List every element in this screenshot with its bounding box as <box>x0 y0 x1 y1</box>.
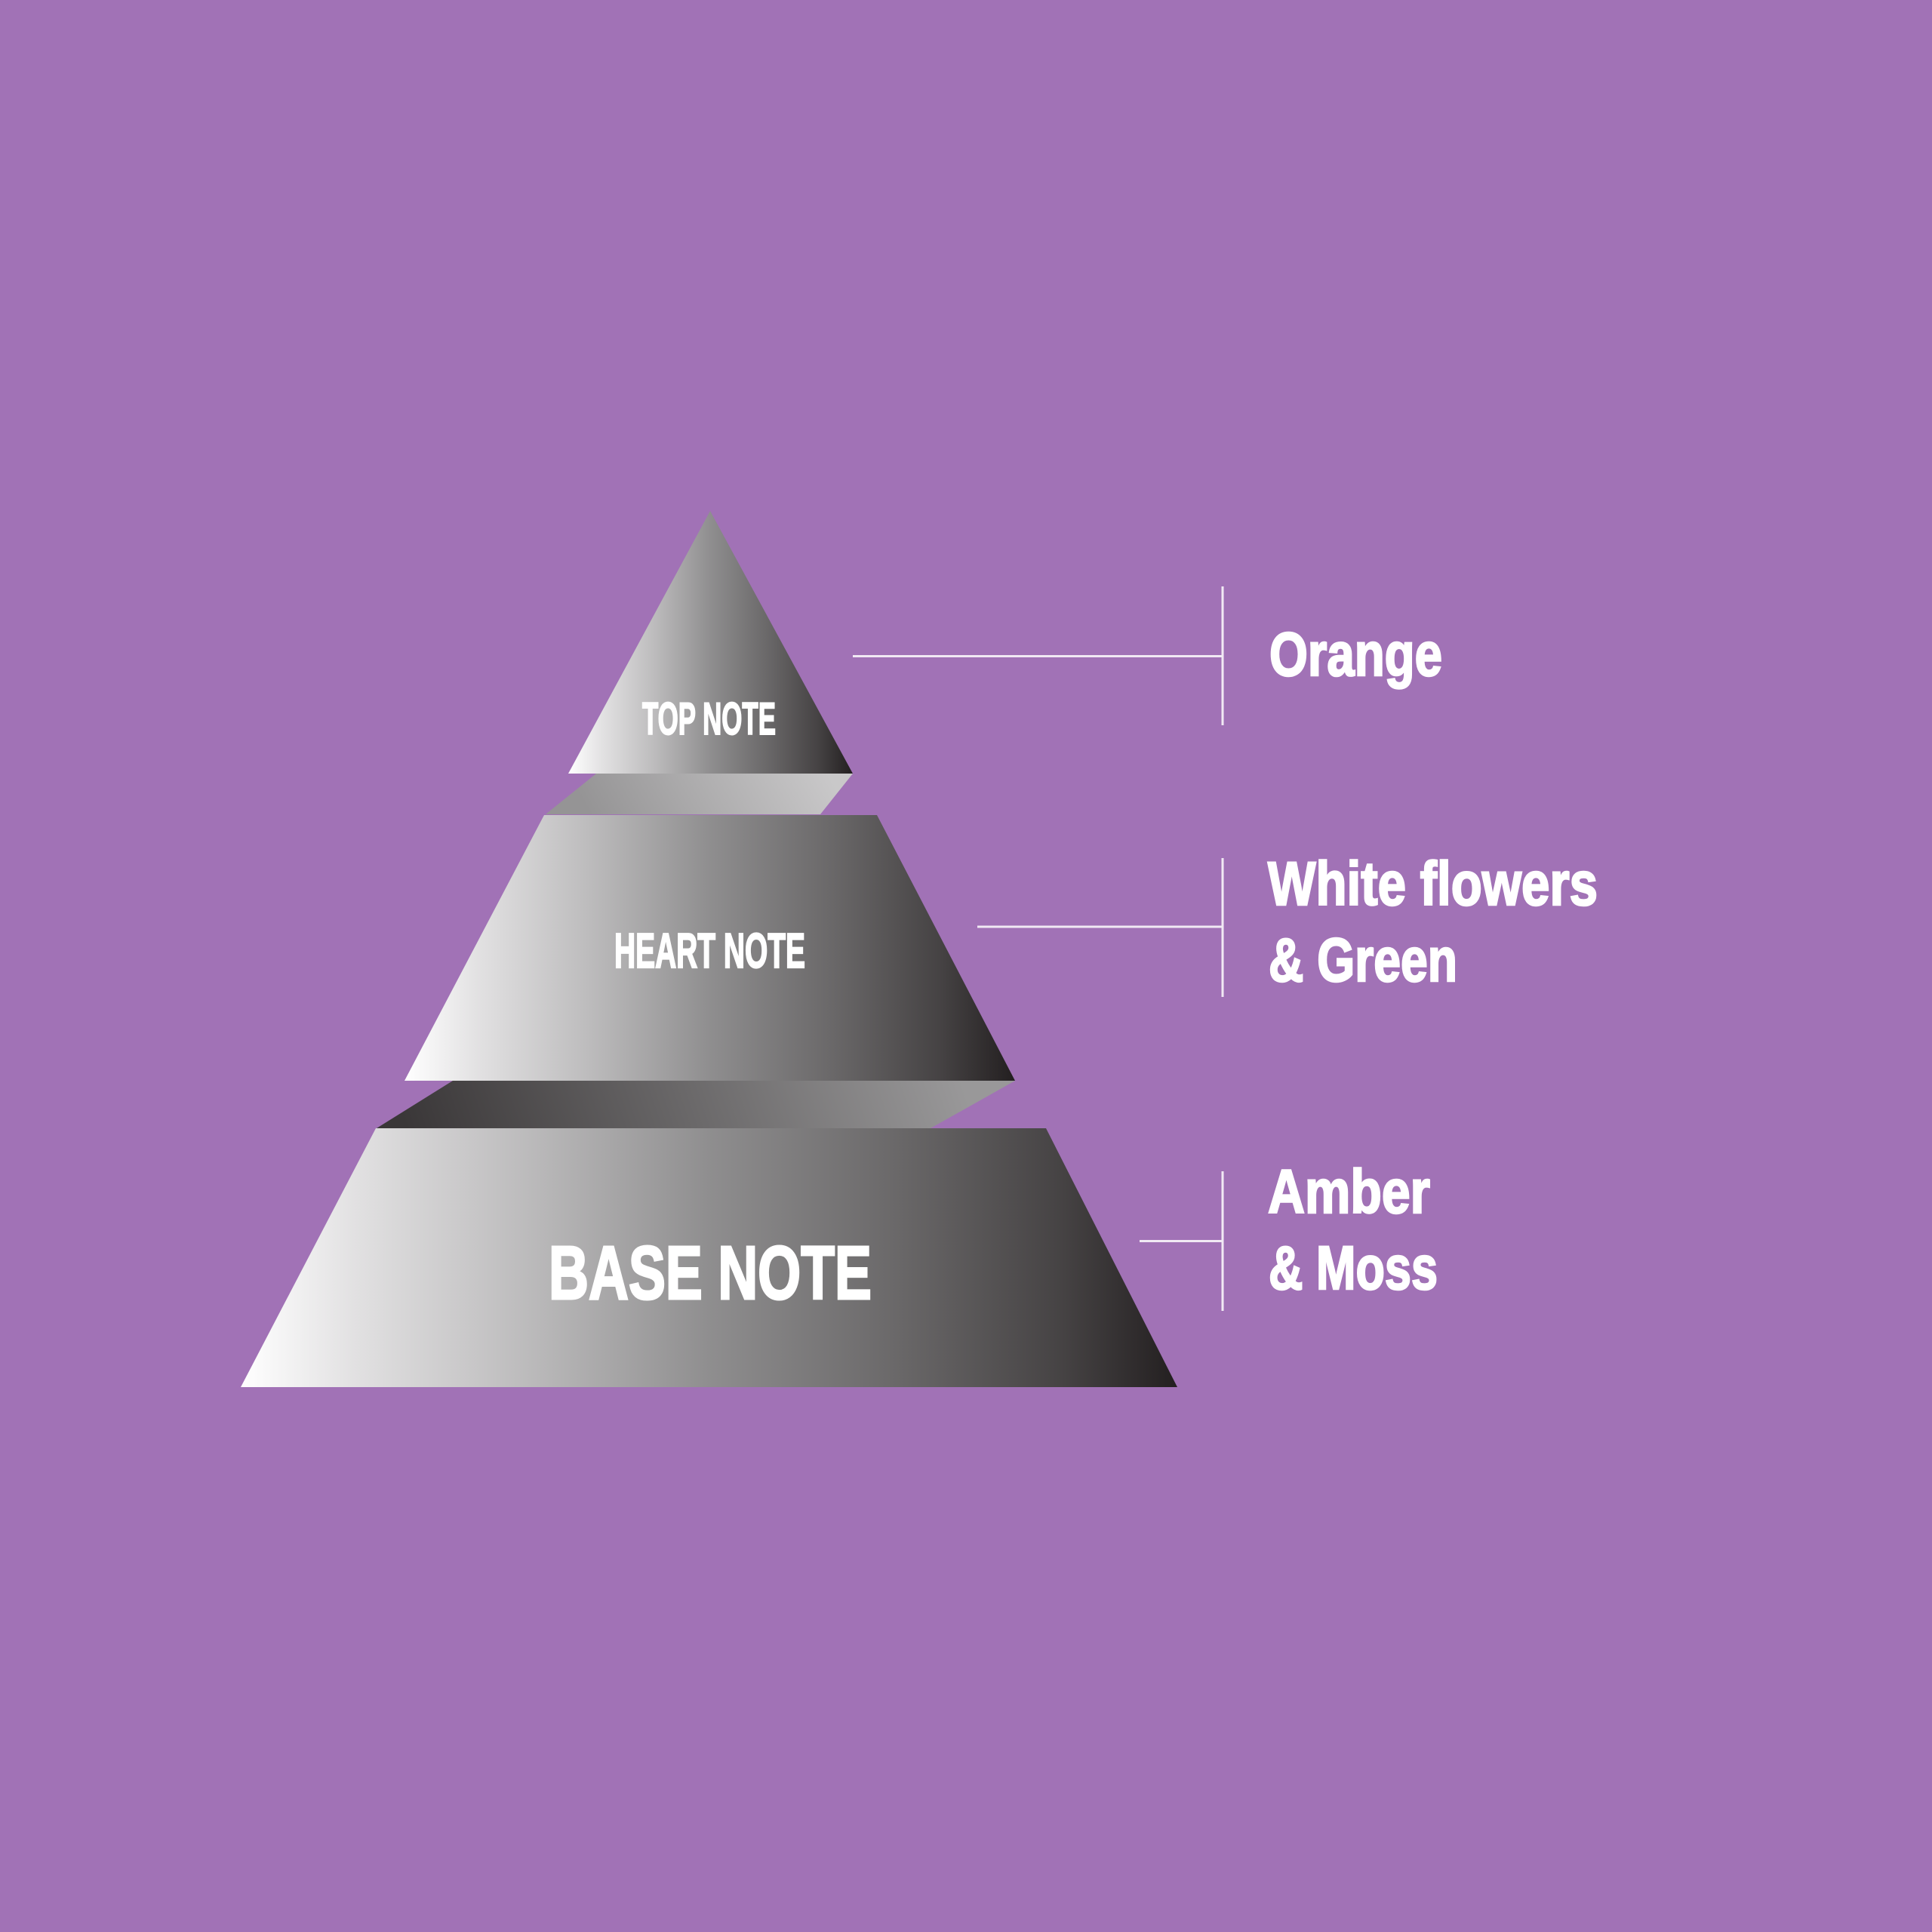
tier: top note <box>568 511 853 774</box>
label: top note: TOP NOTE <box>642 694 776 744</box>
pyramid <box>241 511 1177 1387</box>
text: White flowers & Green: & Green <box>1269 926 1457 995</box>
leader line: base note <box>1140 1171 1223 1311</box>
text: Amber & Moss: & Moss <box>1269 1234 1438 1303</box>
text: Amber & Moss: Amber <box>1268 1158 1430 1226</box>
text: Amber & Moss <box>1268 1158 1438 1303</box>
callout: heart note ingredients <box>977 850 1598 997</box>
connecting band: top to heart <box>546 774 853 814</box>
leader line: heart note <box>977 858 1223 997</box>
text: White flowers & Green: White flowers <box>1268 850 1598 918</box>
text: Orange: Orange <box>1269 620 1442 689</box>
connecting band: heart to base <box>377 1081 1015 1128</box>
label: heart note: HEART NOTE <box>614 923 805 978</box>
tier: heart note <box>405 815 1015 1081</box>
leader line: top note <box>853 586 1223 725</box>
text: White flowers & Green <box>1268 850 1598 995</box>
tier: base note <box>241 1128 1177 1387</box>
label: base note: BASE NOTE <box>549 1231 872 1315</box>
callout: base note ingredients <box>1140 1158 1438 1311</box>
